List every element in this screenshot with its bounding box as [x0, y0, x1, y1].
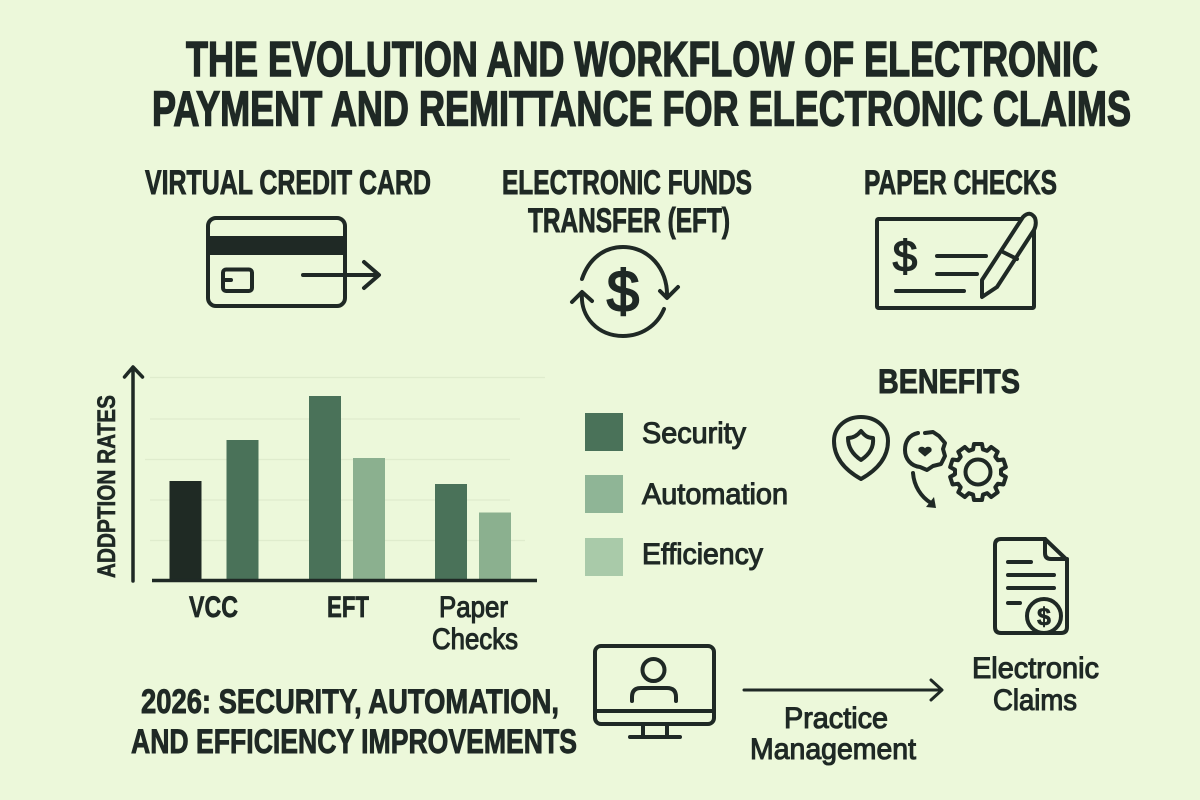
arrow: practice management to electronic claims [744, 680, 942, 700]
legend item: automation [585, 475, 788, 513]
heading: electronic funds transfer: ELECTRONIC FUNDS [502, 164, 752, 202]
icon: computer monitor with user [595, 646, 714, 737]
heading: electronic funds transfer: TRANSFER (EFT) [528, 202, 730, 240]
x axis label: EFT: EFT [327, 591, 369, 624]
heading: benefits: BENEFITS [878, 363, 1020, 401]
x axis label: Paper Checks [432, 591, 518, 656]
label: electronic claims [972, 652, 1099, 717]
icon: circular dollar transfer [572, 247, 678, 336]
label: practice management: Practice [784, 702, 888, 735]
icon: credit card with arrow [208, 218, 379, 306]
icon: circular dollar transfer: $ [607, 259, 639, 324]
bars: EFT [309, 396, 385, 580]
icon: paper check with pen [877, 214, 1036, 308]
icon: head with heart and arrow [905, 432, 945, 508]
label: electronic claims: Electronic [972, 652, 1099, 685]
icon: electronic claim document [995, 539, 1067, 633]
legend item: security: Security [642, 417, 746, 450]
icon: gear [949, 444, 1007, 500]
heading: virtual credit card: VIRTUAL CREDIT CARD [145, 164, 431, 202]
text: 2026 improvements [131, 683, 577, 761]
legend item: efficiency: Efficiency [642, 538, 763, 571]
label: practice management: Management [750, 733, 917, 766]
legend [585, 413, 788, 576]
icon: electronic claim document: $ [1037, 603, 1051, 631]
x axis label: Paper Checks: Paper [439, 591, 508, 624]
label: practice management [750, 702, 917, 766]
y axis label: ADDPTION RATES [93, 395, 121, 578]
legend item: security [585, 413, 746, 451]
icon: security shield pin [834, 417, 888, 479]
icon: paper check with pen: $ [893, 232, 917, 281]
label: electronic claims: Claims [993, 684, 1077, 717]
bar chart: adoption rates [93, 367, 545, 656]
legend item: automation: Automation [642, 478, 788, 511]
x axis label: Paper Checks: Checks [432, 623, 518, 656]
bars: VCC [170, 440, 258, 580]
x axis label: VCC: VCC [189, 591, 238, 624]
heading: paper checks: PAPER CHECKS [864, 164, 1057, 202]
heading: electronic funds transfer [502, 164, 752, 240]
legend item: efficiency [585, 538, 763, 576]
y axis arrow [124, 367, 142, 581]
title [152, 33, 1131, 136]
bars: Paper Checks [435, 484, 511, 580]
text: 2026 improvements: 2026: SECURITY, AUTOMATION, [141, 683, 559, 721]
text: 2026 improvements: AND EFFICIENCY IMPROVEMENTS [131, 723, 577, 761]
